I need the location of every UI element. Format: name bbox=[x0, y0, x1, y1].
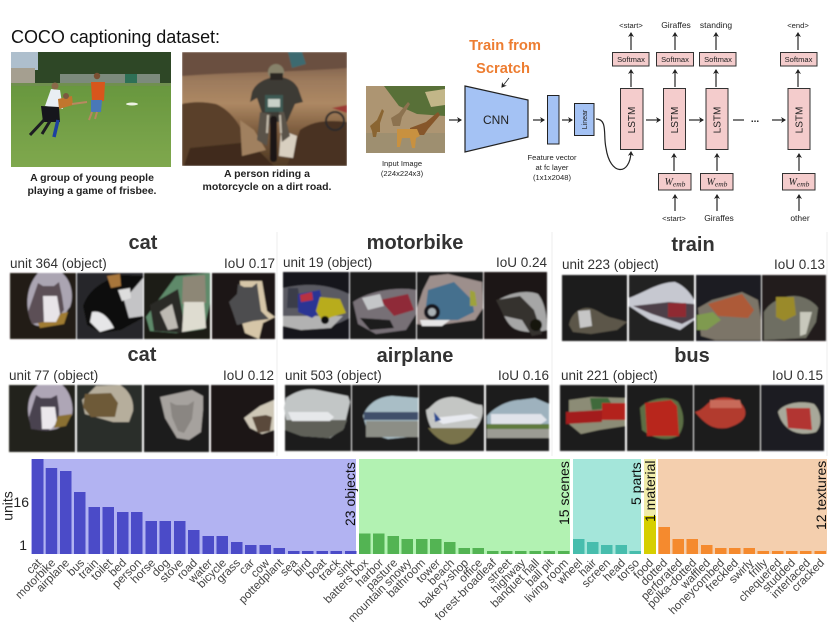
x axis labels: food bbox=[631, 556, 656, 582]
word embedding 1: emb bbox=[673, 180, 686, 188]
x axis labels: wheel bbox=[554, 556, 585, 588]
section: material: 1 material bbox=[642, 461, 658, 522]
softmax 2 bbox=[656, 52, 694, 66]
word embedding 1: W bbox=[665, 177, 673, 188]
section: parts: 5 parts bbox=[628, 462, 644, 505]
input words: Giraffes bbox=[704, 213, 734, 223]
softmax 3: Softmax bbox=[704, 55, 732, 64]
unit label: unit 221 (object) bbox=[561, 368, 658, 383]
x axis labels: chequered bbox=[736, 556, 784, 604]
x axis labels: cat bbox=[24, 556, 45, 577]
section: textures: 12 textures bbox=[813, 461, 829, 530]
output words: <start> bbox=[619, 21, 643, 30]
unit label: unit 223 (object) bbox=[562, 257, 659, 272]
label: input image: Input Image bbox=[382, 159, 422, 168]
IoU label: IoU 0.17 bbox=[224, 256, 275, 271]
x axis labels: banquet hall bbox=[488, 556, 542, 610]
LSTM 4: LSTM bbox=[794, 107, 806, 133]
unit label: unit 364 (object) bbox=[10, 256, 107, 271]
architecture diagram: CNN and LSTM captioning bbox=[366, 20, 817, 223]
x axis labels: living room bbox=[522, 556, 571, 605]
output words: Giraffes bbox=[661, 20, 691, 30]
x axis labels: car bbox=[237, 556, 257, 577]
image tiles bbox=[560, 385, 824, 451]
LSTM 4 bbox=[788, 88, 810, 150]
LSTM 2: LSTM bbox=[670, 107, 681, 133]
x axis labels: bed bbox=[106, 556, 129, 579]
x axis labels: motorbike bbox=[13, 556, 58, 602]
x axis labels: studded bbox=[760, 556, 798, 595]
CNN block bbox=[465, 86, 528, 152]
x axis labels: water bbox=[185, 556, 215, 586]
LSTM 2 bbox=[664, 88, 686, 150]
word embedding 3 bbox=[782, 174, 815, 190]
x axis labels: mountain snowy bbox=[346, 556, 414, 623]
output words: standing bbox=[700, 20, 732, 30]
x axis labels: cow bbox=[248, 556, 273, 580]
caption: frisbee: A group of young people bbox=[30, 172, 154, 184]
panel: bus unit 221 bbox=[560, 345, 824, 451]
softmax 3 bbox=[700, 52, 736, 66]
feature vector bar bbox=[548, 96, 559, 144]
section: parts bbox=[573, 459, 644, 554]
LSTM 1 bbox=[620, 88, 643, 150]
heading: cat bbox=[129, 232, 158, 254]
y axis bbox=[0, 491, 29, 553]
arrows: LSTM to softmax and outputs bbox=[631, 33, 798, 87]
word embedding 2 bbox=[700, 174, 733, 190]
IoU label: IoU 0.12 bbox=[223, 368, 274, 383]
x axis labels: hair bbox=[576, 556, 599, 579]
x axis labels: freckled bbox=[703, 556, 741, 594]
x axis labels: horse bbox=[128, 556, 158, 586]
arrow: image to CNN bbox=[449, 119, 461, 121]
CNN block: CNN bbox=[483, 113, 509, 127]
unit label: unit 77 (object) bbox=[9, 368, 98, 383]
image tiles bbox=[284, 385, 549, 451]
x axis labels: person bbox=[110, 556, 144, 591]
x axis labels: sea bbox=[278, 556, 301, 579]
section: material bbox=[642, 459, 658, 554]
panel edges bbox=[276, 232, 828, 456]
x axis labels: frilly bbox=[746, 556, 770, 580]
softmax 1: Softmax bbox=[617, 55, 645, 64]
unit label: unit 19 (object) bbox=[283, 255, 372, 270]
softmax 1 bbox=[612, 52, 649, 66]
x axis labels: polka-dotted bbox=[645, 556, 699, 611]
x axis labels bbox=[13, 556, 827, 623]
panel: motorbike unit 19 bbox=[283, 232, 547, 339]
word embedding 3: emb bbox=[797, 180, 810, 188]
label: feature vector: Feature vector bbox=[528, 153, 577, 162]
x axis labels: pottedplant bbox=[236, 556, 287, 606]
label: input image bbox=[381, 159, 424, 178]
word embedding 3: W bbox=[789, 177, 797, 188]
heading: bus bbox=[674, 345, 710, 367]
input words: <start> bbox=[662, 214, 686, 223]
x axis labels: torso bbox=[615, 556, 642, 584]
image tiles bbox=[283, 272, 547, 339]
y axis: 1 bbox=[19, 537, 27, 553]
x axis labels: boat bbox=[304, 556, 330, 582]
IoU label: IoU 0.13 bbox=[774, 257, 825, 272]
x axis labels: bus bbox=[65, 556, 87, 579]
x axis labels: grass bbox=[214, 556, 243, 586]
x axis labels: track bbox=[316, 556, 343, 583]
heading: cat bbox=[128, 344, 157, 366]
arrow: linear to first LSTM bbox=[596, 119, 631, 170]
x axis labels: train bbox=[76, 556, 101, 582]
x axis labels: street bbox=[484, 556, 515, 586]
x axis labels: sink bbox=[333, 556, 357, 580]
heading: motorbike bbox=[367, 232, 463, 254]
IoU label: IoU 0.15 bbox=[772, 368, 823, 383]
label: feature vector bbox=[528, 153, 577, 182]
image tiles bbox=[10, 273, 275, 339]
softmax 4: Softmax bbox=[785, 55, 813, 64]
LSTM 3: LSTM bbox=[712, 107, 724, 133]
photo: frisbee players on grass bbox=[11, 52, 171, 167]
x axis labels: cracked bbox=[789, 556, 827, 594]
x axis labels: bakery-shop bbox=[417, 556, 471, 611]
linear block bbox=[574, 104, 594, 136]
title: COCO captioning dataset: COCO captioning dataset: bbox=[11, 27, 220, 47]
arrows: between LSTMs: ... bbox=[751, 114, 759, 125]
x axis labels: perforated bbox=[639, 556, 685, 603]
input image: giraffes bbox=[366, 86, 445, 153]
x axis labels: pasture bbox=[364, 556, 400, 593]
section: objects bbox=[31, 459, 358, 554]
x axis labels: toilet bbox=[89, 556, 116, 583]
x axis labels: tower bbox=[414, 556, 443, 586]
x axis labels: harbor bbox=[353, 556, 386, 589]
callout: Train from Scratch: Train from bbox=[469, 38, 541, 54]
x axis labels: dog bbox=[149, 556, 172, 579]
IoU label: IoU 0.24 bbox=[496, 255, 547, 270]
x axis labels: office bbox=[456, 556, 485, 585]
y axis: 16 bbox=[13, 494, 29, 510]
LSTM 1: LSTM bbox=[627, 107, 638, 133]
arrow: CNN to feature vector bbox=[533, 119, 544, 121]
panel: airplane unit 503 bbox=[284, 345, 549, 451]
heading: train bbox=[671, 234, 715, 256]
section: scenes bbox=[359, 459, 572, 554]
input words: other bbox=[790, 213, 810, 223]
x axis labels: road bbox=[175, 556, 200, 582]
x axis labels: ball pit bbox=[523, 556, 557, 589]
x axis labels: batters box bbox=[321, 556, 371, 606]
x axis labels: screen bbox=[579, 556, 613, 590]
label: feature vector: at fc layer bbox=[536, 163, 569, 172]
linear block: Linear bbox=[582, 109, 589, 129]
photo: motorcycle on dirt road bbox=[182, 52, 347, 166]
bar chart: units per concept bbox=[0, 459, 829, 623]
label: feature vector: (1x1x2048) bbox=[533, 173, 571, 182]
x axis labels: dotted bbox=[638, 556, 670, 588]
x axis labels: bird bbox=[291, 556, 314, 579]
input words bbox=[662, 213, 810, 223]
arrows: between LSTMs bbox=[646, 114, 785, 125]
softmax 2: Softmax bbox=[661, 55, 689, 64]
caption: motorcycle bbox=[203, 168, 332, 193]
word embedding 2: emb bbox=[715, 180, 728, 188]
arrows: embeddings to LSTM and inputs bbox=[674, 154, 799, 211]
caption: motorcycle: motorcycle on a dirt road. bbox=[203, 181, 332, 193]
unit label: unit 503 (object) bbox=[285, 368, 382, 383]
softmax 4 bbox=[780, 52, 817, 66]
x axis labels: head bbox=[601, 556, 628, 584]
section: scenes: 15 scenes bbox=[556, 461, 572, 525]
LSTM 3 bbox=[706, 88, 728, 150]
output words bbox=[619, 20, 809, 30]
x axis labels: airplane bbox=[34, 556, 72, 595]
panel: cat unit 77 bbox=[9, 344, 274, 452]
x axis labels: stove bbox=[157, 556, 186, 585]
callout: Train from Scratch bbox=[469, 38, 541, 87]
x axis labels: honeycombed bbox=[666, 556, 727, 617]
x axis labels: bathroom bbox=[384, 556, 428, 600]
x axis labels: bicycle bbox=[195, 556, 229, 591]
callout: Train from Scratch: Scratch bbox=[476, 61, 530, 77]
x axis labels: interlaced bbox=[768, 556, 813, 601]
word embedding 1 bbox=[658, 174, 691, 190]
panel: train unit 223 bbox=[562, 234, 826, 341]
label: input image: (224x224x3) bbox=[381, 169, 424, 178]
x axis labels: forest-broadleaf bbox=[433, 556, 500, 623]
heading: airplane bbox=[377, 345, 453, 367]
x axis labels: waffled bbox=[677, 556, 713, 592]
image tiles bbox=[562, 275, 826, 341]
caption: frisbee bbox=[28, 172, 157, 197]
section: objects: 23 objects bbox=[342, 462, 358, 526]
caption: frisbee: playing a game of frisbee. bbox=[28, 185, 157, 197]
x axis labels: swirly bbox=[726, 556, 756, 586]
x axis labels: beach bbox=[426, 556, 457, 588]
arrow: feature vector to linear bbox=[562, 119, 572, 121]
section: textures bbox=[658, 459, 829, 554]
x axis labels: highway bbox=[489, 556, 528, 596]
caption: motorcycle: A person riding a bbox=[224, 168, 310, 180]
IoU label: IoU 0.16 bbox=[498, 368, 549, 383]
image tiles bbox=[9, 385, 274, 452]
panel: cat unit 364 bbox=[10, 232, 275, 339]
word embedding 2: W bbox=[707, 177, 715, 188]
output words: <end> bbox=[787, 21, 809, 30]
